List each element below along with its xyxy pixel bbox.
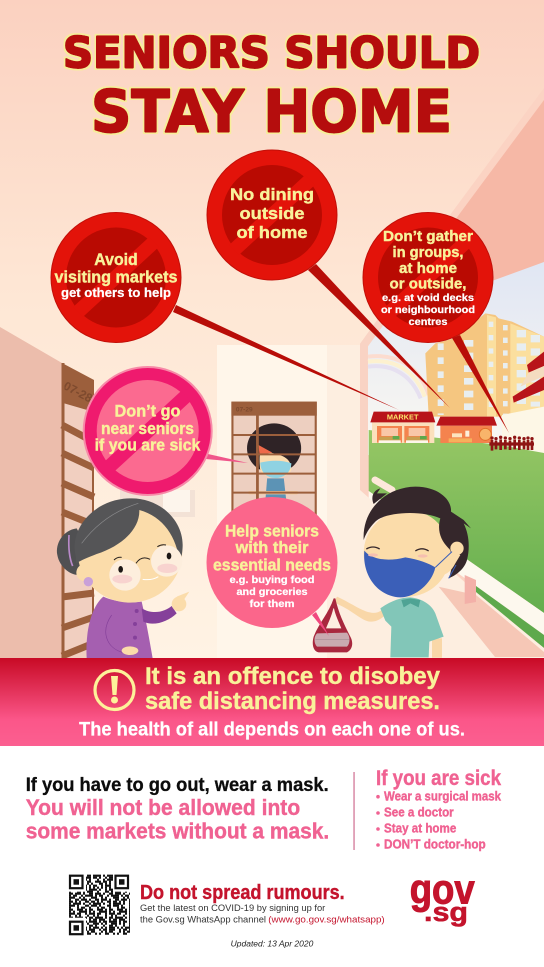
panel: do not gather: or outside, [390, 277, 466, 293]
panel: help seniors: Help seniors [225, 522, 319, 541]
panel: do not go near seniors [84, 367, 212, 495]
rumours notice: the Gov.sg WhatsApp channel [140, 915, 266, 926]
if you are sick list: See a doctor [384, 805, 454, 820]
man with mask [334, 487, 471, 658]
panel: avoid markets [51, 212, 181, 342]
elderly woman [57, 498, 189, 658]
QR code [68, 874, 131, 937]
panel: help seniors: e.g. buying food [230, 574, 314, 586]
panel: help seniors [206, 497, 338, 628]
pointer lines [173, 264, 509, 463]
panel: do not gather: e.g. at void decks [382, 292, 474, 304]
woman in doorway [247, 423, 301, 500]
parapet and walkway [327, 480, 544, 658]
panel: do not gather: centres [408, 316, 448, 328]
market stall: MARKET [387, 412, 419, 421]
outdoor view: sky, rainbow, buildings [364, 262, 544, 490]
rumours notice: Do not spread rumours. [140, 882, 345, 904]
mask advice: You will not be allowed into [26, 795, 300, 820]
background: corridor scene [0, 0, 544, 660]
warning band: The health of all depends on each one of us. [79, 719, 465, 741]
panel: help seniors: essential needs [213, 556, 331, 575]
rumours notice: Get the latest on COVID-19 by signing up for [140, 903, 326, 914]
center gate with sick woman: 07-29 [236, 406, 253, 413]
gov.sg logo: .sg [424, 897, 468, 927]
left flat gate: 07-28 [61, 379, 95, 406]
warning band: safe distancing measures. [145, 688, 440, 715]
title: SENIORS SHOULD [63, 28, 480, 78]
rumours notice [140, 882, 385, 926]
gov.sg logo [410, 866, 475, 927]
mask advice: some markets without a mask. [26, 818, 329, 843]
title: STAY HOME [91, 78, 452, 146]
if you are sick list: If you are sick [376, 767, 501, 790]
panel: help seniors: with their [235, 538, 309, 557]
grocery bag [313, 598, 352, 652]
left flat gate [61, 363, 95, 660]
mask advice [26, 774, 329, 843]
panel: do not go near seniors: near seniors [101, 419, 194, 438]
panel: avoid markets: get others to help [61, 285, 171, 300]
if you are sick list: Stay at home [384, 821, 456, 836]
panel: no dining: outside [240, 204, 304, 223]
window on wall [120, 490, 195, 517]
panel: do not gather: in groups, [392, 245, 464, 261]
panel: help seniors: and groceries [236, 586, 308, 598]
icon: exclamation [95, 670, 134, 710]
panel: do not go near seniors: if you are sick [95, 436, 201, 455]
if you are sick list [376, 767, 502, 852]
panel: do not gather: or neighbourhood [381, 304, 475, 316]
market stall [370, 412, 435, 443]
panel: do not gather [363, 212, 493, 342]
panel: help seniors: for them [250, 598, 294, 610]
panel: avoid markets: visiting markets [54, 268, 178, 286]
panel: do not go near seniors: Don’t go [114, 402, 180, 421]
gov.sg logo: gov [410, 866, 475, 912]
if you are sick list: Wear a surgical mask [384, 788, 502, 803]
center gate with sick woman [231, 402, 317, 516]
panel: no dining: No dining [230, 185, 314, 204]
panel: no dining: of home [236, 223, 308, 242]
crowd of people [489, 436, 534, 451]
panel: do not gather: at home [399, 261, 457, 277]
pointer: help seniors [312, 612, 329, 636]
mask advice: If you have to go out, wear a mask. [26, 774, 329, 796]
if you are sick list: DON’T doctor-hop [384, 837, 486, 852]
food shop [436, 417, 497, 443]
grass lawn [369, 430, 544, 613]
panel: do not gather: Don’t gather [383, 229, 473, 245]
panel: no dining [207, 150, 337, 280]
warning band: It is an offence to disobey [145, 663, 441, 690]
warning band [0, 658, 544, 746]
title [63, 28, 480, 146]
rumours notice: (www.go.gov.sg/whatsapp) [268, 915, 385, 926]
panel: avoid markets: Avoid [94, 251, 138, 269]
update date: Updated: 13 Apr 2020 [231, 938, 314, 948]
